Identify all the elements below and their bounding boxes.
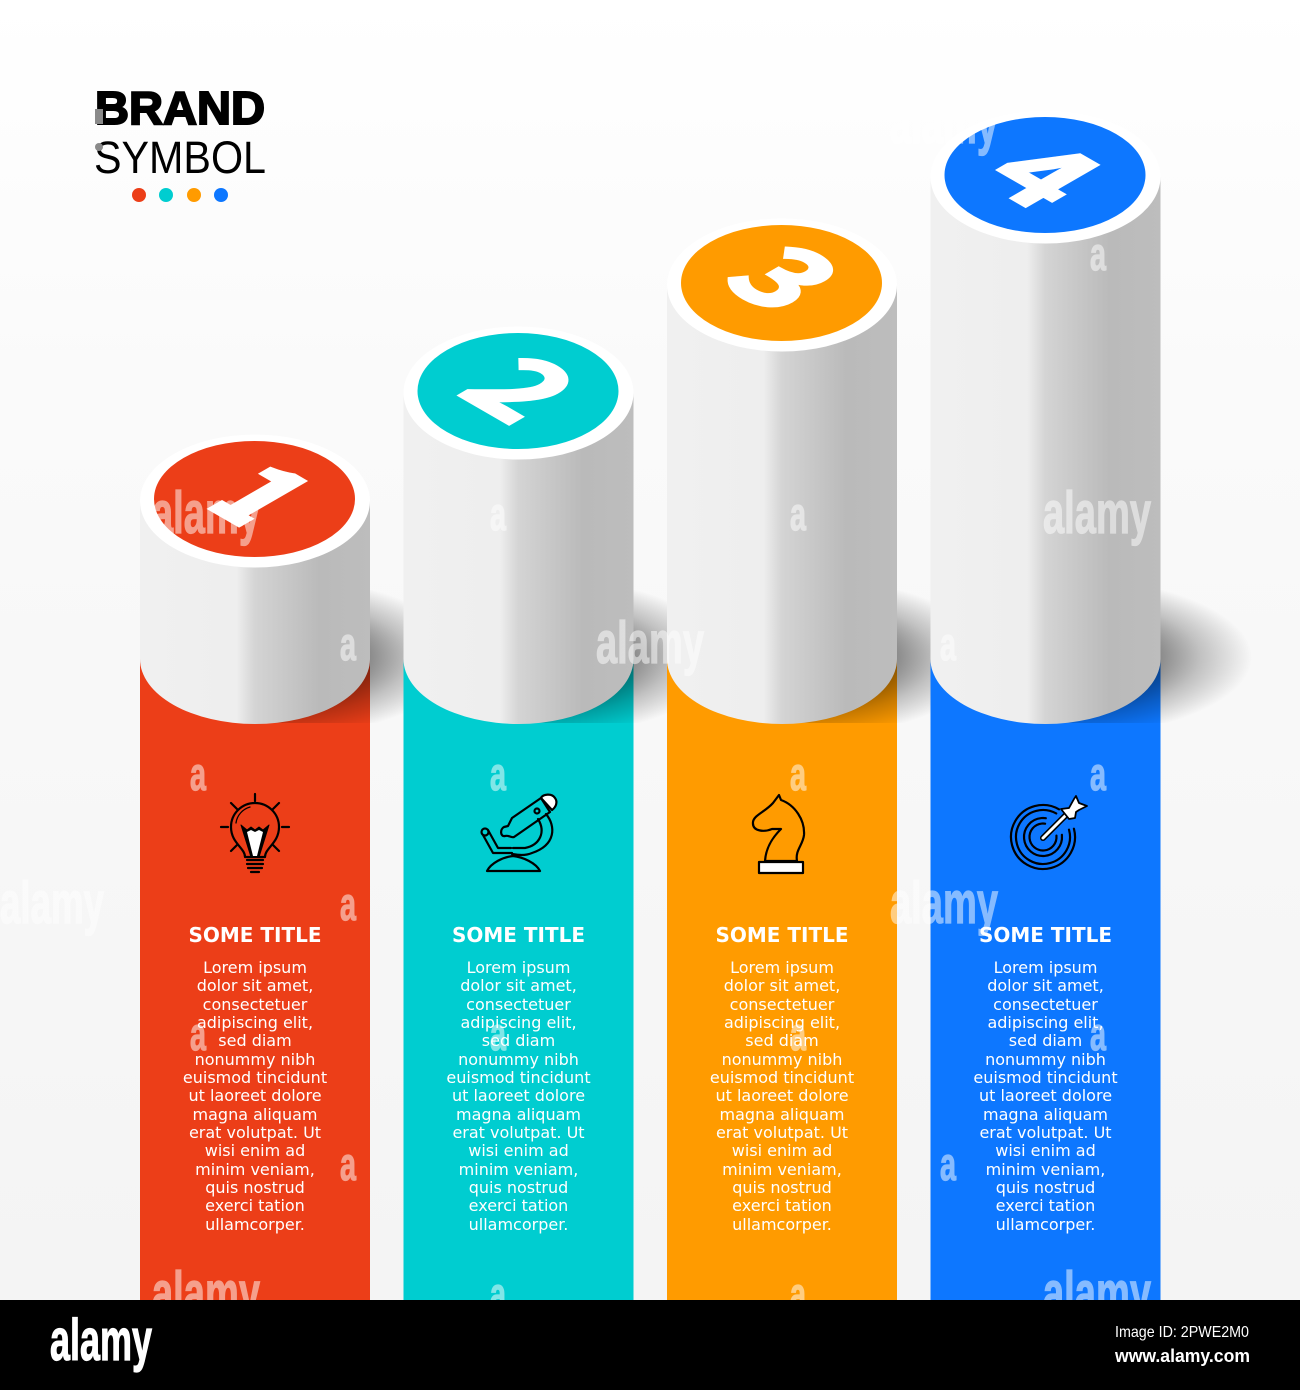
logo: brand symbol: SYMBOL — [94, 132, 266, 183]
watermarks: alamy — [1043, 480, 1151, 546]
text: step 1: quis nostrud — [205, 1178, 305, 1197]
watermarks: a — [340, 878, 356, 930]
text: step 2: Lorem ipsum — [467, 958, 570, 977]
text: step 4: consectetuer — [993, 995, 1098, 1014]
text: step 1: SOME TITLE — [188, 923, 322, 947]
text: step 1: consectetuer — [203, 995, 308, 1014]
text: step 1: adipiscing elit, — [197, 1013, 313, 1032]
text: step 1: dolor sit amet, — [197, 976, 313, 995]
text: step 4: magna aliquam — [983, 1105, 1108, 1124]
watermarks: a — [1090, 228, 1106, 280]
watermarks: a — [790, 748, 806, 800]
text: step 1: magna aliquam — [193, 1105, 317, 1124]
text: step 3: sed diam — [745, 1031, 819, 1050]
logo: brand symbol — [94, 82, 266, 202]
panel: step 3: 3 — [690, 215, 892, 332]
text: step 4: exerci tation — [996, 1196, 1095, 1215]
watermarks: alamy — [596, 610, 704, 676]
text: step 3: wisi enim ad — [732, 1141, 832, 1160]
text: step 3: magna aliquam — [720, 1105, 844, 1124]
panel: step 4: 4 — [950, 112, 1152, 229]
panel: step 3 — [575, 215, 989, 1300]
text: step 4: quis nostrud — [996, 1178, 1095, 1197]
text: step 4: adipiscing elit, — [987, 1013, 1104, 1032]
watermarks: alamy — [890, 870, 998, 936]
icon: light bulb — [221, 794, 289, 872]
footer bar: www.alamy.com — [1114, 1346, 1250, 1366]
text: step 2: dolor sit amet, — [460, 976, 577, 995]
text: step 2: magna aliquam — [456, 1105, 581, 1124]
text: step 3: euismod tincidunt — [710, 1068, 854, 1087]
text: step 1: Lorem ipsum — [203, 958, 307, 977]
icon: target with arrow — [1004, 796, 1087, 876]
text: step 2: ullamcorper. — [469, 1215, 568, 1234]
panel: step 2 — [312, 326, 726, 1300]
text: step 1: wisi enim ad — [205, 1141, 305, 1160]
text: step 3: ut laoreet dolore — [715, 1086, 849, 1105]
text: step 4: minim veniam, — [986, 1160, 1105, 1179]
text: step 1: sed diam — [218, 1031, 292, 1050]
text: step 2: erat volutpat. Ut — [452, 1123, 585, 1142]
text: step 1: nonummy nibh — [195, 1050, 315, 1069]
text: step 3: ullamcorper. — [732, 1215, 832, 1234]
text: step 4: Lorem ipsum — [994, 958, 1097, 977]
text: step 2: consectetuer — [466, 995, 571, 1014]
text: step 1: ullamcorper. — [205, 1215, 305, 1234]
watermarks: a — [1090, 1008, 1106, 1060]
text: step 3: adipiscing elit, — [724, 1013, 840, 1032]
text: step 4: dolor sit amet, — [987, 976, 1104, 995]
logo: brand symbol: BRAND — [95, 82, 265, 134]
watermarks: a — [490, 1268, 506, 1320]
text: step 3 — [710, 923, 854, 1234]
text: step 3: SOME TITLE — [715, 923, 849, 947]
watermarks: a — [340, 1138, 356, 1190]
watermarks — [0, 90, 1151, 1326]
panel: step 1: 1 — [166, 433, 368, 550]
watermarks: a — [940, 1138, 956, 1190]
text: step 4: euismod tincidunt — [973, 1068, 1118, 1087]
text: step 4: ullamcorper. — [996, 1215, 1095, 1234]
watermarks: a — [790, 1008, 806, 1060]
text: step 2: minim veniam, — [459, 1160, 578, 1179]
text: step 4 — [973, 923, 1118, 1234]
watermarks: a — [190, 1008, 206, 1060]
text: step 1: euismod tincidunt — [183, 1068, 327, 1087]
watermarks: a — [490, 748, 506, 800]
watermarks: a — [940, 618, 956, 670]
text: step 1: minim veniam, — [195, 1160, 315, 1179]
text: step 4: SOME TITLE — [979, 923, 1112, 947]
text: step 2: exerci tation — [469, 1196, 568, 1215]
text: step 1: erat volutpat. Ut — [189, 1123, 321, 1142]
text: step 3: dolor sit amet, — [724, 976, 840, 995]
text: step 2: adipiscing elit, — [460, 1013, 577, 1032]
text: step 2: SOME TITLE — [452, 923, 585, 947]
text: step 2: euismod tincidunt — [446, 1068, 591, 1087]
text: step 4: erat volutpat. Ut — [979, 1123, 1112, 1142]
footer bar — [0, 1300, 1300, 1390]
text: step 3: minim veniam, — [722, 1160, 842, 1179]
text: step 3: Lorem ipsum — [730, 958, 834, 977]
footer bar: alamy — [50, 1308, 152, 1373]
watermarks: a — [1090, 748, 1106, 800]
footer bar: Image ID: 2PWE2M0 — [1115, 1324, 1249, 1341]
watermarks: a — [790, 1268, 806, 1320]
text: step 2: wisi enim ad — [468, 1141, 569, 1160]
icon: microscope — [482, 795, 556, 871]
watermarks: a — [340, 618, 356, 670]
watermarks: a — [790, 488, 806, 540]
text: step 2 — [446, 923, 591, 1234]
text: step 2: nonummy nibh — [458, 1050, 579, 1069]
text: step 2: sed diam — [482, 1031, 555, 1050]
icon: chess knight — [753, 795, 804, 873]
text: step 3: quis nostrud — [732, 1178, 832, 1197]
panel: step 4 — [930, 117, 1244, 1300]
watermarks: alamy — [152, 480, 260, 546]
watermarks: alamy — [152, 1260, 260, 1326]
panel: step 1 — [48, 433, 462, 1300]
watermarks: alamy — [1043, 1260, 1151, 1326]
text: step 2: quis nostrud — [469, 1178, 568, 1197]
text: step 1: exerci tation — [205, 1196, 305, 1215]
text: step 3: exerci tation — [732, 1196, 832, 1215]
text: step 4: nonummy nibh — [985, 1050, 1106, 1069]
text: step 1: ut laoreet dolore — [188, 1086, 322, 1105]
text: step 4: sed diam — [1009, 1031, 1082, 1050]
watermarks: alamy — [890, 90, 998, 156]
panel: step 2: 2 — [427, 326, 629, 443]
watermarks: alamy — [0, 870, 104, 936]
text: step 3: nonummy nibh — [722, 1050, 842, 1069]
watermarks: a — [190, 748, 206, 800]
text: step 4: wisi enim ad — [995, 1141, 1096, 1160]
text: step 2: ut laoreet dolore — [452, 1086, 585, 1105]
watermarks: a — [490, 1008, 506, 1060]
text: step 1 — [183, 923, 327, 1234]
text: step 3: consectetuer — [730, 995, 835, 1014]
text: step 3: erat volutpat. Ut — [716, 1123, 848, 1142]
text: step 4: ut laoreet dolore — [979, 1086, 1112, 1105]
watermarks: a — [490, 488, 506, 540]
